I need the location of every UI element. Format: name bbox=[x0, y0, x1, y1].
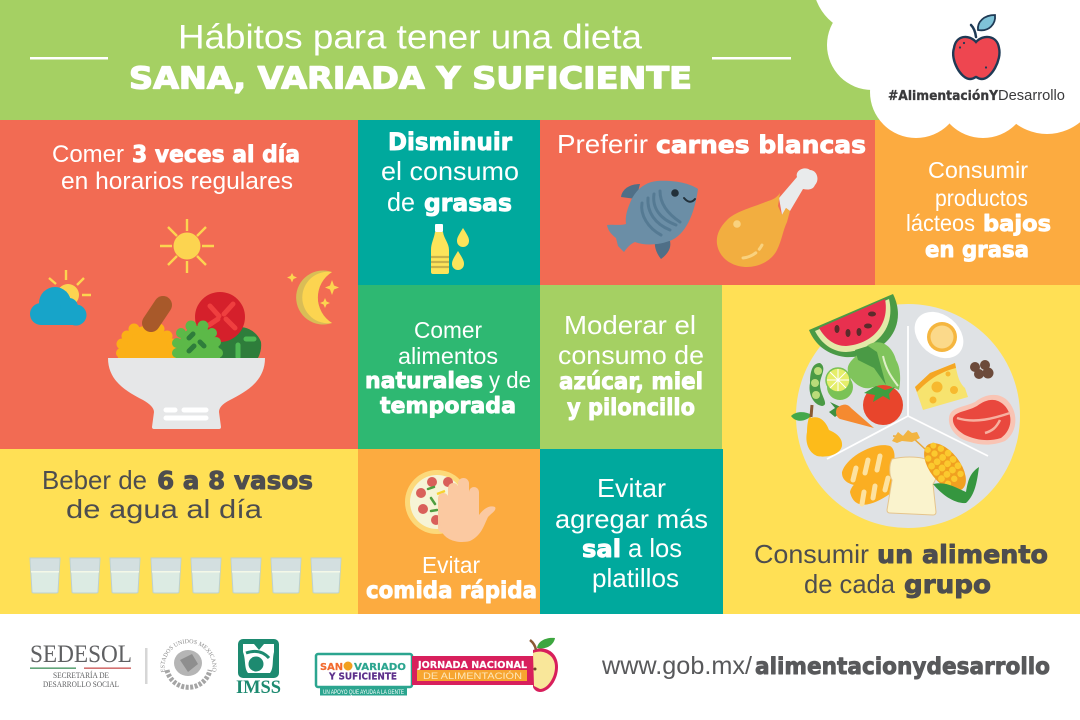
logo: jornada nacional de alimentación bbox=[412, 656, 534, 685]
text: disminuir el consumo de grasas: el consumo bbox=[381, 156, 519, 186]
title: SANA, VARIADA Y SUFICIENTE bbox=[129, 62, 692, 96]
icon: fish bbox=[607, 181, 698, 259]
panel: moderar azúcar: azúcar, miel bbox=[559, 369, 703, 395]
icon: lime bbox=[826, 368, 853, 400]
logo: sano variado y suficiente bbox=[316, 654, 412, 696]
panel: alimentos naturales: alimentos bbox=[398, 343, 498, 369]
text: consumir un alimento bbox=[754, 539, 1048, 599]
logo: sano variado y suficiente: UN APOYO QUE AYUDA A LA GENTE bbox=[323, 690, 404, 696]
logo: IMSS: IMSS bbox=[236, 677, 281, 698]
text: disminuir el consumo de grasas bbox=[381, 128, 519, 217]
logo: sano variado y suficiente: Y SUFICIENTE bbox=[328, 672, 397, 682]
panel: evitar comida rápida bbox=[358, 449, 541, 615]
icon: egg bbox=[905, 302, 973, 368]
icon: corn bbox=[916, 436, 979, 503]
url: alimentacionydesarrollo bbox=[755, 652, 1050, 680]
hashtag bbox=[888, 88, 1065, 104]
icon: beans bbox=[970, 360, 994, 379]
heading: comer 3 veces: en horarios regulares bbox=[61, 168, 293, 195]
url: www.gob.mx/ bbox=[601, 652, 752, 680]
panel: evitar sal: Evitar bbox=[597, 473, 666, 503]
logo: jornada nacional de alimentación: JORNADA NACIONAL bbox=[417, 660, 528, 671]
icon: pea pod bbox=[810, 363, 845, 417]
panel: moderar azúcar: consumo de bbox=[558, 340, 704, 370]
icon: toast bbox=[887, 457, 936, 515]
logo: national seal bbox=[160, 639, 216, 690]
text: preferir carnes blancas: carnes blancas bbox=[656, 131, 866, 159]
panel: alimentos naturales bbox=[358, 285, 541, 450]
header band bbox=[0, 0, 1080, 121]
panel: evitar sal: platillos bbox=[592, 563, 679, 593]
logo: IMSS bbox=[236, 639, 281, 698]
icon: chicken leg bbox=[717, 168, 817, 267]
panel: evitar sal: agregar más bbox=[555, 504, 708, 534]
logo: sano variado y suficiente: SAN bbox=[320, 662, 343, 673]
icon: sun bbox=[160, 219, 214, 273]
text: evitar comida rápida bbox=[366, 552, 537, 604]
text: preferir carnes blancas bbox=[557, 129, 866, 159]
logo: jornada nacional de alimentación: DE ALIMENTACIÓN bbox=[423, 671, 522, 682]
text: disminuir el consumo de grasas: de bbox=[387, 187, 415, 217]
panel: beber agua bbox=[0, 449, 359, 615]
hashtag: Desarrollo bbox=[998, 88, 1065, 104]
icon: cheese bbox=[915, 363, 968, 410]
hashtag: #AlimentaciónY bbox=[888, 88, 998, 104]
panel: lácteos bajos en grasa: productos bbox=[935, 185, 1028, 211]
panel: lácteos bajos en grasa: en grasa bbox=[925, 238, 1029, 263]
text: preferir carnes blancas: Preferir bbox=[557, 129, 648, 159]
text: beber de 6 a 8 vasos bbox=[42, 465, 313, 524]
logo: sano variado y suficiente: VARIADO bbox=[354, 662, 406, 673]
icon: wheat bbox=[892, 430, 925, 449]
text: beber de 6 a 8 vasos: 6 a 8 vasos bbox=[157, 466, 313, 495]
icon: bread loaf bbox=[842, 445, 902, 505]
panel: lácteos bajos en grasa bbox=[875, 120, 1080, 285]
icon: tomato bbox=[863, 385, 903, 425]
text: disminuir el consumo de grasas: grasas bbox=[424, 189, 512, 217]
text: beber de 6 a 8 vasos: Beber de bbox=[42, 465, 147, 495]
icon: apple bbox=[953, 15, 1000, 79]
panel: alimentos naturales: y de bbox=[489, 367, 531, 393]
panel: alimentos naturales: temporada bbox=[380, 394, 516, 419]
panel: alimentos naturales: Comer bbox=[414, 317, 482, 343]
url bbox=[601, 652, 1050, 680]
panel: moderar azúcar: Moderar el bbox=[564, 310, 696, 340]
icon: bowl of food bbox=[108, 292, 265, 429]
logo: SEDESOL bbox=[30, 641, 132, 689]
text: beber de 6 a 8 vasos: de agua al día bbox=[66, 494, 263, 524]
text: consumir un alimento: Consumir bbox=[754, 539, 869, 569]
panel: comer 3 veces al día bbox=[0, 120, 359, 450]
panel: moderar azúcar bbox=[540, 285, 723, 450]
icon: cloud with sun bbox=[30, 270, 91, 326]
icon: pizza and hand bbox=[405, 470, 495, 542]
panel: lácteos bajos en grasa: Consumir bbox=[928, 157, 1028, 183]
icon: carrot bbox=[836, 405, 874, 428]
heading: comer 3 veces bbox=[52, 141, 300, 195]
panel: evitar sal: a los bbox=[628, 533, 682, 563]
icon: pear bbox=[791, 405, 842, 457]
text: disminuir el consumo de grasas: Disminuir bbox=[388, 128, 512, 156]
icon: watermelon bbox=[809, 294, 898, 357]
panel: alimentos naturales: naturales bbox=[365, 369, 483, 394]
panel: carnes blancas bbox=[540, 120, 876, 285]
heading: comer 3 veces: Comer bbox=[52, 141, 124, 168]
text: evitar comida rápida: Evitar bbox=[422, 552, 480, 578]
logo: SEDESOL: SEDESOL bbox=[30, 641, 132, 668]
icon: oil bottle and drops bbox=[431, 224, 469, 274]
logo: national seal: ESTADOS UNIDOS MEXICANOS bbox=[160, 639, 216, 672]
chart: food plate bbox=[791, 294, 1020, 528]
panel: un alimento de cada grupo bbox=[722, 285, 1080, 615]
text: consumir un alimento: un alimento bbox=[877, 540, 1048, 569]
text: consumir un alimento: de cada bbox=[804, 569, 896, 599]
panel: lácteos bajos en grasa: bajos bbox=[983, 212, 1051, 237]
icon: lettuce bbox=[848, 342, 900, 390]
panel: disminuir grasas bbox=[358, 120, 541, 285]
text: evitar comida rápida: comida rápida bbox=[366, 578, 537, 604]
icon: moon and stars bbox=[287, 270, 339, 324]
icon: eight water glasses bbox=[30, 558, 341, 593]
logo: SEDESOL: SECRETARÍA DE bbox=[53, 670, 109, 680]
panel: lácteos bajos en grasa: lácteos bbox=[906, 210, 975, 236]
panel: evitar sal bbox=[540, 449, 723, 615]
icon: steak bbox=[949, 395, 1015, 445]
heading: comer 3 veces: 3 veces al día bbox=[132, 142, 300, 168]
panel: moderar azúcar: y piloncillo bbox=[567, 395, 695, 421]
text: consumir un alimento: grupo bbox=[904, 570, 991, 599]
panel: evitar sal: sal bbox=[582, 535, 621, 563]
title: Hábitos para tener una dieta bbox=[178, 18, 642, 56]
logo: SEDESOL: DESARROLLO SOCIAL bbox=[43, 680, 119, 689]
title bbox=[129, 18, 692, 96]
icon: apple half bbox=[530, 638, 558, 692]
cloud badge bbox=[813, 0, 1080, 138]
